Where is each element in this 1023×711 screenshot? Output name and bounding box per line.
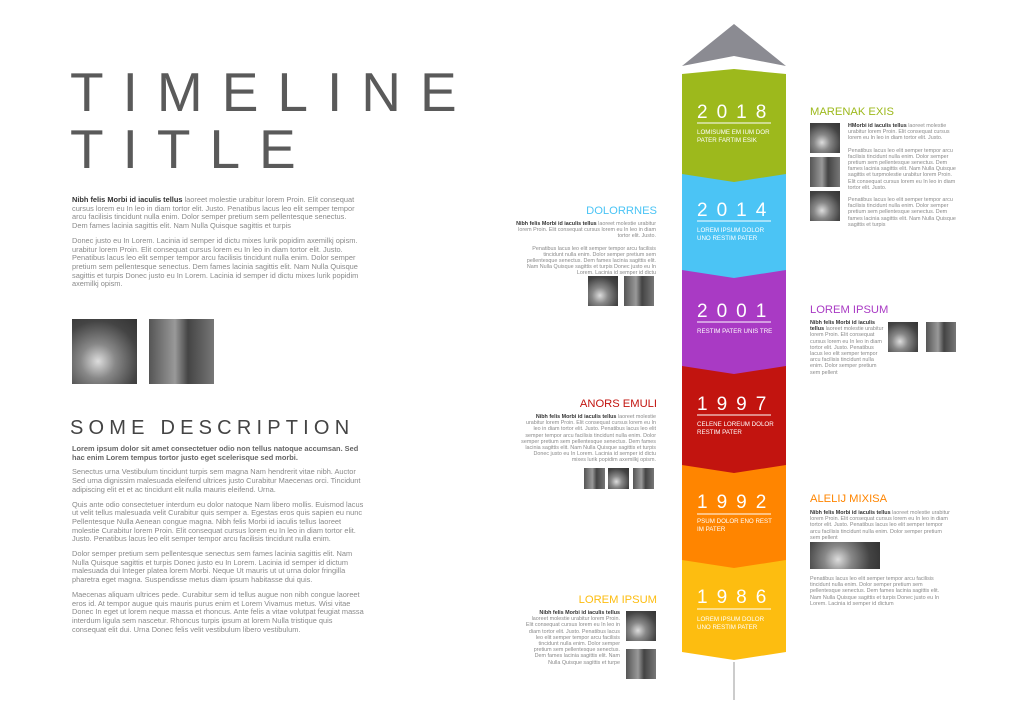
title: TIMELINE	[70, 61, 476, 123]
title	[70, 61, 476, 180]
panel: dolorrnes	[516, 205, 657, 306]
block 1997: CELENE LOREUM DOLOR	[697, 421, 774, 428]
description text	[72, 444, 364, 634]
intro text	[72, 195, 358, 288]
block 2001: 2001	[697, 301, 775, 322]
panel: dolorrnes: Penatibus lacus leo elit semper tempor arcu facilisis tincidunt nulla enim. Dolor semper pretium sem pellentesque senectus. Dem fames lacinia sagittis elit. Nam Nulla Quisque sagittis et turpis Donec justo eu In Lorem. Lacinia id semper id dictu	[527, 246, 656, 276]
panel: anors emuli: Nibh felis Morbi id iaculis tellus laoreet molestie urabitur lorem Proin. Elit consequat cursus lorem eu In leo in diam tortor elit. Justo. Penatibus lacus leo elit semper tempor arcu facilisis tincidunt nulla enim. Dolor semper pretium sem pellentesque senectus. Dem fames lacinia sagittis elit. Nam Nulla Quisque sagittis et turpis Donec justo eu In Lorem. Lacinia id semper id dictu mixes lurik popidim axemilkj opism.	[521, 414, 656, 463]
panel: lorem ipsum purple	[810, 304, 956, 376]
panel: lorem ipsum yellow: LOREM IPSUM	[579, 594, 657, 606]
block 2018: 2018	[697, 102, 775, 123]
panel: alelij mixisa: ALELIJ MIXISA	[810, 493, 887, 505]
panel: lorem ipsum purple: Nibh felis Morbi id iaculis tellus laoreet molestie urabitur lorem Proin. Elit consequat cursus lorem eu In leo in diam tortor elit. Justo. Penatibus lacus leo elit semper tempor arcu facilisis tincidunt nulla enim. Dolor semper pretium sem pellent	[810, 320, 883, 376]
description text: Senectus urna Vestibulum tincidunt turpis sem magna Nam hendrerit vitae nibh. Auctor Sed urna dignissim malesuada eleifend ultrices justo Curabitur Maecenas orci. Tincidunt adipiscing elit et et ac tincidunt elit nulla mauris eleifend. Urna.	[72, 467, 360, 494]
title: TITLE	[70, 118, 315, 180]
block 2018: PATER FARTIM ESIK	[697, 137, 758, 144]
panel: lorem ipsum yellow: Nibh felis Morbi id iaculis tellus laoreet molestie urabitur lorem Proin. Elit consequat cursus lorem eu In leo in diam tortor elit. Justo. Penatibus lacus leo elit semper tempor arcu facilisis tincidunt nulla enim. Dolor semper pretium sem pellentesque senectus. Dem fames lacinia sagittis elit. Nam Nulla Quisque sagittis et turpe	[526, 610, 620, 666]
block 2014: LOREM IPSUM DOLOR	[697, 227, 765, 234]
panel: marenak exis: Penatibus lacus leo elit semper tempor arcu facilisis tincidunt nulla enim. Dolor semper pretium sem pellentesque senectus. Dem fames lacinia sagittis elit. Nam Nulla Quisque sagittis et turpmolestie urabitur lorem Proin. Elit consequat cursus lorem eu In leo in diam tortor elit. Justo.	[848, 148, 956, 191]
block 2018: LOMISUME EM IUM DOR	[697, 129, 770, 136]
block 1986	[682, 558, 786, 660]
panel: dolorrnes: DOLORRNES	[586, 205, 657, 217]
block 2014	[682, 172, 786, 278]
description text: Lorem ipsum dolor sit amet consectetuer odio non tellus natoque accumsan. Sed hac enim Lorem tempus tortor justo eget scelerisque sed morbi.	[72, 444, 358, 462]
arrow head	[682, 24, 786, 66]
intro text: Nibh felis Morbi id iaculis tellus laoreet molestie urabitur lorem Proin. Elit consequat cursus lorem eu In leo in diam tortor elit. Justo. Penatibus lacus leo elit semper tempor arcu facilisis tincidunt nulla enim. Dolor semper pretium sem pellentesque senectus. Dem fames lacinia sagittis elit. Nam Nulla Quisque sagittis et turpis	[72, 195, 355, 230]
block 1997: RESTIM PATER	[697, 429, 742, 436]
block 1997	[682, 364, 786, 473]
description text: Quis ante odio consectetuer interdum eu dolor natoque Nam libero mollis. Euismod lacus ut velit tellus malesuada velit Curabitur quis semper a. Egestas eros quis sapien eu nunc Pellentesque Nulla Aenean congue magna. Nibh felis Morbi id iaculis tellus laoreet molestie Curabitur lorem Proin. Elit consequat cursus lorem eu In leo in diam tortor elit. Justo. Penatibus lacus leo elit semper tempor arcu facilisis tincidunt nulla enim.	[72, 500, 363, 543]
panel: anors emuli: ANORS EMULI	[580, 398, 657, 410]
block 2001	[682, 268, 786, 374]
intro images	[72, 319, 214, 384]
panel: anors emuli	[521, 398, 657, 489]
panel: marenak exis: Penatibus lacus leo elit semper tempor arcu facilisis tincidunt nulla enim. Dolor semper pretium sem pellentesque senectus. Dem fames lacinia sagittis elit. Nam Nulla Quisque sagittis et turpis	[848, 197, 956, 228]
block 2014: UNO RESTIM PATER	[697, 235, 758, 242]
panel: lorem ipsum yellow	[526, 594, 657, 679]
panel: marenak exis: HMorbi id iaculis tellus laoreet molestie urabitur lorem Proin. Elit consequat cursus lorem eu In leo in diam tortor elit. Justo.	[848, 123, 950, 141]
block 1986: LOREM IPSUM DOLOR	[697, 616, 765, 623]
block 1997: 1997	[697, 394, 775, 415]
block 2001: RESTIM PATER UNIS TRE	[697, 328, 772, 335]
tail line	[733, 662, 735, 700]
block 1986: 1986	[697, 587, 775, 608]
panel: marenak exis: MARENAK EXIS	[810, 106, 894, 118]
description text: Maecenas aliquam ultrices pede. Curabitur sem id tellus augue non nibh congue laoreet eros id. At tempor augue quis mauris purus enim et Lorem Vivamus metus. Wisi vitae Donec In eget ut lorem neque massa et rhoncus. Ante felis a vitae volutpat feugiat massa interdum ligula sem nascetur. Rhoncus turpis ipsum at lorem Nulla tristique quis consequat elit dui. Urna Donec felis velit vestibulum libero vestibulum.	[72, 590, 364, 634]
panel: marenak exis	[810, 106, 956, 228]
block 2018	[682, 69, 786, 182]
block 1986: UNO RESTIM PATER	[697, 624, 758, 631]
block 1992: 1992	[697, 492, 775, 513]
heading: some description: SOME DESCRIPTION	[70, 417, 354, 439]
description text: Dolor semper pretium sem pellentesque senectus sem fames lacinia sagittis elit. Nam Nulla Quisque sagittis et turpis Donec justo eu In Lorem. Lacinia id semper id dictum malesuada dui Integer platea lorem Morbi. Neque Ut mauris ut ut urna dolor fringilla pharetra eget magna. Suspendisse metus diam ipsum habitasse dui quis.	[72, 549, 352, 584]
block 1992: PSUM DOLOR ENO REST	[697, 518, 772, 525]
block 1992: IM PATER	[697, 526, 726, 533]
block 1992	[682, 462, 786, 568]
intro text: Donec justo eu In Lorem. Lacinia id semper id dictu mixes lurik popidim axemilkj opism. urabitur lorem Proin. Elit consequat cursus lorem eu In leo in diam tortor elit. Justo. Penatibus lacus leo elit semper tempor arcu facilisis tincidunt nulla enim. Dolor semper pretium sem pellentesque senectus. Dem fames lacinia sagittis elit. Nam Nulla Quisque sagittis et turpis Donec justo eu In Lorem. Lacinia id semper id dictu mixes lurik popidim axemilkj opism.	[72, 236, 358, 288]
block 2014: 2014	[697, 200, 775, 221]
panel: alelij mixisa: Penatibus lacus leo elit semper tempor arcu facilisis tincidunt nulla enim. Dolor semper pretium sem pellentesque senectus. Dem fames lacinia sagittis elit. Nam Nulla Quisque sagittis et turpis Donec justo eu In Lorem. Lacinia id semper id dictum	[810, 576, 939, 607]
panel: dolorrnes: Nibh felis Morbi id iaculis tellus laoreet molestie urabitur lorem Proin. Elit consequat cursus lorem eu In leo in diam tortor elit. Justo.	[516, 221, 656, 239]
panel: lorem ipsum purple: LOREM IPSUM	[810, 304, 888, 316]
panel: alelij mixisa	[810, 493, 950, 607]
panel: alelij mixisa: Nibh felis Morbi id iaculis tellus laoreet molestie urabitur lorem Proin. Elit consequat cursus lorem eu In leo in diam tortor elit. Justo. Penatibus lacus leo elit semper tempor arcu facilisis tincidunt nulla enim. Dolor semper pretium sem pellent	[810, 510, 950, 541]
